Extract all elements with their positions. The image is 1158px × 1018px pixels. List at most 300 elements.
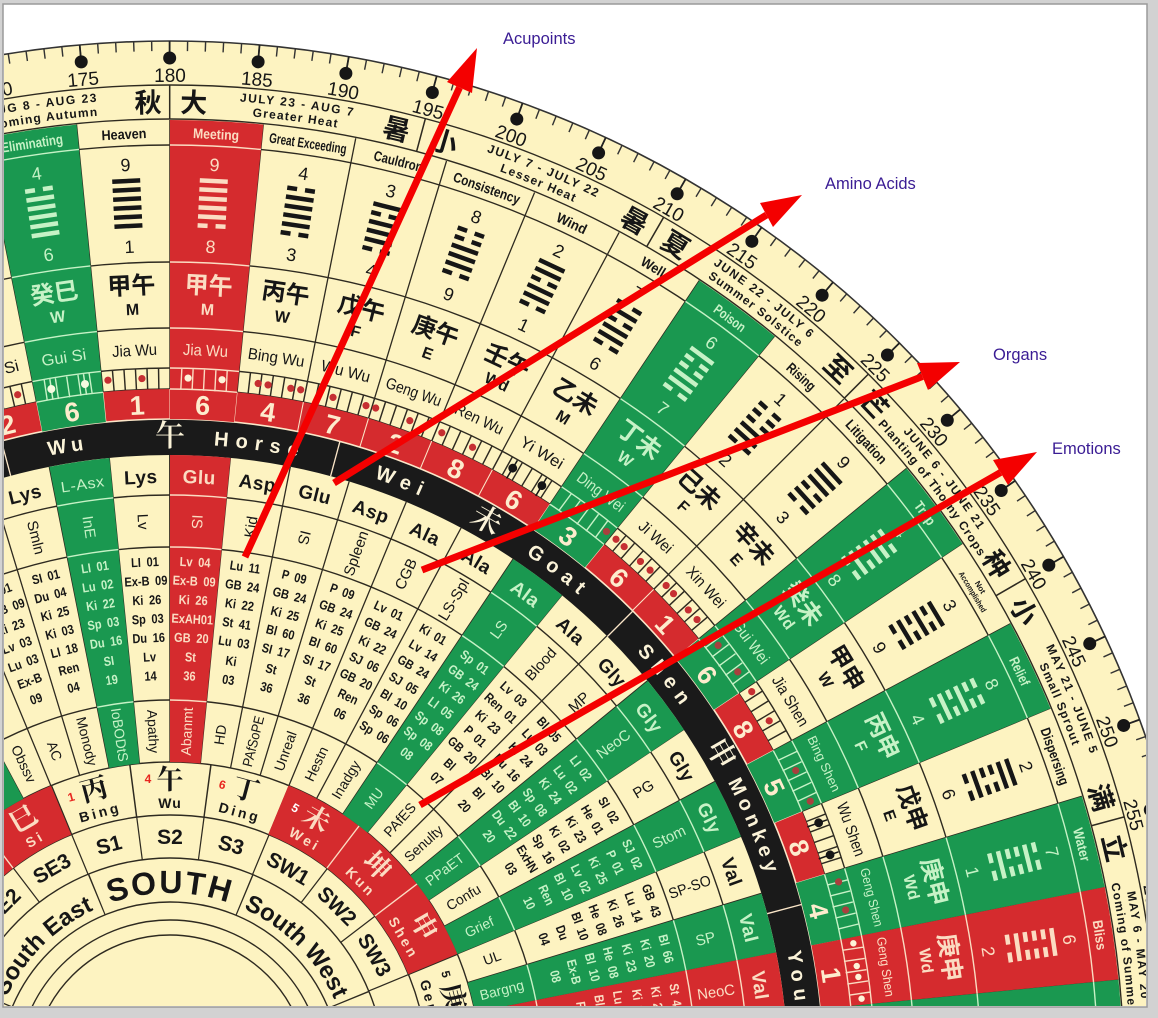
sector: Well: M (552, 407, 573, 429)
sector: Bliss: Wd (915, 947, 935, 974)
sector: Water: Ki 20 (637, 938, 658, 970)
solar term dates: JULY 23 - AUG 7 (240, 94, 354, 116)
stem ring: Bing: 丙 (75, 765, 112, 810)
solar term characters: 暑 (380, 112, 413, 148)
sector: Great Exceeding: Lu 03 (217, 633, 251, 652)
degree dot stems (78, 41, 1140, 724)
sector: Meeting: 甲午 (184, 272, 233, 301)
sector: Consistency: 9 (441, 283, 457, 305)
sector: Monody: Smln (23, 519, 48, 556)
sector: Great Exceeding: GB 24 (224, 576, 261, 596)
direction sectors: SW2 (312, 882, 361, 931)
sector: Poison: Poison (711, 301, 749, 335)
sector: Water: Ki 23 (618, 942, 640, 974)
sector: Dispersing: Bl 10 (568, 910, 592, 943)
direction sectors (0, 826, 395, 981)
zodiac band labels: Horse (214, 432, 298, 456)
sector: Heaven: Jia Wu (112, 342, 157, 361)
sector: Rising (384, 362, 815, 837)
sector: Relief: Stom (650, 822, 689, 853)
sector: Not Accomplished: Jia Shen (768, 673, 811, 730)
degree labels: 180 (154, 66, 186, 87)
sector: Not Accomplished: ExHN (513, 842, 541, 875)
sector: Consistency: Unreal (271, 729, 300, 773)
sector: Cauldron: IS (294, 528, 314, 546)
sector: Eliminating: IoBODtS (108, 707, 132, 763)
sector: Litigation: Litigation (842, 416, 891, 467)
solar term characters (134, 88, 1131, 865)
arrow: acupoints (245, 48, 477, 557)
icon: hexagram (789, 463, 841, 514)
sector: Well: 乙未 (547, 374, 602, 421)
sector: Consistency: GB 24 (317, 597, 355, 622)
icon: hexagram (362, 203, 401, 254)
number ring (4, 389, 824, 882)
zodiac band labels: Shen (638, 644, 688, 705)
sector: Cauldron: P 09 (280, 567, 308, 587)
sector: Heaven: 甲午 (107, 272, 156, 301)
degree labels: 230 (915, 414, 952, 451)
solar term characters: 至 (818, 349, 858, 390)
sector: Dispersing: 戊申 (891, 781, 932, 835)
sector: Litigation: Bl 10 (477, 765, 508, 797)
label: Emotions: Emotions (1052, 440, 1121, 458)
sector: Meeting: Ki 26 (178, 592, 208, 609)
direction sectors: S3 (216, 831, 246, 860)
sector: Trap: Gly (630, 699, 666, 737)
sector: Wind: 8 (442, 452, 469, 486)
solar term dates: MAY 6 - MAY 20 (1127, 891, 1146, 998)
sector: Wind: Wind (554, 209, 590, 237)
degree dots (74, 52, 1146, 815)
solar term characters: 秋 (134, 88, 162, 119)
sector: Meeting: St (185, 649, 196, 665)
icon: hexagram (989, 842, 1040, 881)
sector: Wind: Hestn (301, 744, 331, 784)
sector: Relief: 5 (757, 774, 791, 801)
sector: Relief: Lv 02 (567, 862, 594, 896)
sector: Trap: 8 (823, 570, 845, 590)
solar term dates: Coming of Summer (1112, 883, 1134, 1005)
solar term dates: JUNE 6 - JUNE 21 (904, 428, 984, 530)
sector: Litigation: Du 16 (490, 751, 523, 785)
sector: Cauldron: Cauldron (372, 147, 425, 175)
stem ring: Bing: 1 (66, 789, 77, 805)
sector: Heaven: Lv (134, 513, 151, 531)
sector: Relief: 8 (981, 676, 1003, 693)
icon: hexagram (729, 402, 780, 454)
zodiac band labels: 未 (464, 491, 512, 544)
degree labels: 235 (969, 482, 1004, 520)
sector: Monody: Lys (7, 481, 44, 510)
sector: Heaven: 9 (120, 155, 131, 175)
sector: Bliss: St 41 (666, 983, 685, 1014)
sector: Well: 7 (628, 282, 647, 304)
sector: Trap (425, 500, 934, 886)
solar term dates: JULY 7 - JULY 22 (488, 144, 598, 197)
sector: Wind: Ki 22 (356, 632, 389, 658)
sector: Rising: Rising (783, 359, 819, 394)
sector: Eliminating: Lu 02 (81, 576, 115, 596)
sector: Dispersing: 04 (535, 931, 553, 948)
sector: Cauldron: 3 (384, 180, 398, 202)
sector: Cauldron: Wu Wu (319, 358, 372, 386)
sector: Dispersing: SP-SO (666, 872, 713, 903)
sector: Eliminating: 6 (62, 396, 82, 428)
sector: Bliss: 庚申 (932, 932, 967, 983)
sector: Heaven: Lys (124, 467, 158, 490)
zodiac band labels: 午 (155, 411, 185, 455)
sector: Monody: Ki 25 (39, 603, 71, 625)
sector: Heaven: 14 (144, 668, 157, 684)
sector: Not Accomplished: 甲申 (822, 641, 869, 696)
degree labels: 250 (1091, 714, 1122, 751)
sector: Wind: 2 (550, 240, 567, 262)
sector: Heaven: Ex-B 09 (124, 573, 168, 590)
sector: Water: 1 (961, 865, 983, 879)
sector: Poison: 08 (397, 744, 416, 764)
sector: Wind: GB 20 (337, 665, 375, 694)
sector: Water: Bargng (478, 977, 526, 1003)
direction sectors: SE3 (29, 849, 75, 889)
sector: Well: Sp 06 (357, 718, 392, 747)
sector: Relief: P 01 (603, 848, 627, 877)
sector: Trap: Ki 24 (536, 775, 565, 807)
sector: Trap: Sp 08 (519, 785, 551, 820)
sector: Poison: Sp 08 (412, 708, 447, 739)
solar term dates: MAY 21 - JUNE 5 (1046, 644, 1098, 753)
sector: Not Accomplished: W (814, 670, 836, 692)
sector: Relief: Bing Shen (804, 733, 844, 794)
sector: Wind: Lv 01 (371, 597, 406, 624)
sector: Monody: Ki 03 (44, 621, 76, 643)
sector: Litigation: 20 (455, 797, 474, 816)
sector: AC: Lu 03 (6, 651, 41, 676)
sector: Bliss: 2 (977, 945, 999, 958)
sector: Meeting: 6 (195, 390, 211, 421)
sector: Well: 6 (499, 483, 528, 517)
sector: Water: Bl 10 (581, 951, 603, 983)
sector: Poison: W (614, 448, 637, 472)
direction sectors: S2 (157, 826, 183, 849)
sector: Meeting: ExAH01 (171, 611, 214, 628)
sector: Poison: LS (487, 617, 512, 642)
sector: Consistency: 8 (468, 206, 484, 228)
sector: Rising: Ji Wei (635, 518, 676, 557)
solar term characters: 芒 (853, 385, 894, 425)
sector: Trap: Du 22 (489, 807, 520, 843)
label: Acupoints: Acupoints (503, 30, 575, 48)
stem ring: Geng (416, 965, 480, 1018)
sector: Not Accomplished: PG (630, 777, 657, 802)
solar term characters: 小 (427, 124, 461, 161)
sector: Wind: Wd (482, 370, 511, 396)
sector: Water: 庚申 (915, 855, 954, 908)
sector: Wind: 壬午 (479, 339, 534, 384)
solar term characters: 种 (976, 545, 1016, 584)
stem ring: Ding: 丁 (228, 765, 265, 810)
sector: Trap: Gui Wei (729, 617, 772, 668)
direction sectors: S1 (94, 831, 125, 860)
sector: Cauldron: PAfSoPE (239, 714, 267, 768)
sector: Consistency: 庚午 (408, 310, 463, 352)
sector: Water (473, 814, 1097, 1018)
stem ring: Geng: 庚 (433, 978, 478, 1015)
sector: Not Accomplished: 03 (501, 860, 521, 878)
solar term dates: JUNE 22 - JULY 6 (714, 259, 814, 337)
sector: Trap: 癸未 (777, 577, 828, 631)
sector: Water: Val (734, 912, 761, 945)
sector: Well: GB 24 (395, 652, 432, 683)
sector: Wind (304, 212, 588, 782)
sector: Dispersing: Wu Shen (833, 800, 868, 859)
sector: Great Exceeding: W (273, 308, 292, 327)
sector: Litigation: 1 (649, 609, 681, 640)
sector: Great Exceeding: Asp (237, 471, 277, 497)
sector: Well: Bl 10 (378, 686, 410, 714)
icon: hexagram (594, 300, 641, 353)
sector: Poison: MU (361, 785, 387, 812)
sector: Litigation: Lu 03 (519, 726, 551, 759)
icon: hexagram (112, 180, 142, 227)
solar term characters: 夏 (656, 225, 695, 265)
stem ring: Shen: 申 (402, 904, 450, 947)
icon: hexagram (281, 188, 315, 236)
sector: Monody (4, 360, 96, 765)
sector: Bliss: NeoC (696, 981, 736, 1004)
sector: Poison: Ding Wei (573, 469, 628, 516)
solar term characters: 大 (180, 88, 208, 119)
sector: Great Exceeding: Great Exceeding (268, 130, 348, 157)
stem ring: Wei: Wei (286, 824, 324, 855)
sector: Dispersing: 2 (1015, 759, 1037, 775)
sector: Well: 6 (586, 353, 605, 375)
sector: Eliminating: 19 (105, 672, 119, 688)
sector: Eliminating: Ki 22 (85, 595, 116, 614)
sector: Monody: 04 (66, 679, 82, 696)
sector: Not Accomplished (431, 558, 998, 931)
stem ring: Geng: 5 (438, 969, 454, 980)
sector: Wind: Ren (335, 685, 361, 708)
sector: Heaven: Ki 26 (132, 592, 162, 609)
sector: Consistency: E (419, 344, 435, 364)
sector: Consistency: Spleen (341, 529, 372, 578)
sector: Water: SP (694, 929, 717, 950)
sector: Rising: PAfES (380, 799, 419, 840)
sector: Dispersing: Lu 14 (621, 890, 646, 925)
sector: Heaven: Heaven (101, 125, 147, 143)
icon: hexagram (890, 602, 943, 649)
sector: left partial: Obssv (8, 742, 40, 785)
sector: Bliss: 1 (815, 965, 847, 985)
sector: Relief (453, 641, 1041, 962)
sector: Meeting: 9 (209, 155, 220, 175)
sector: Meeting: 36 (183, 668, 196, 684)
sector: Not Accomplished: He 01 (578, 802, 607, 838)
sector: Not Accomplished: 3 (939, 596, 961, 615)
sector: Rising: 2 (715, 449, 736, 471)
sector: Cauldron: GB 24 (271, 584, 308, 607)
sector: Cauldron: Ki 25 (269, 603, 301, 625)
icon: hexagram (664, 347, 713, 400)
sector: Eliminating: Eliminating (0, 131, 64, 156)
sector: Dispersing: UL (481, 947, 503, 968)
degree scale ticks (8, 42, 1146, 758)
sector: Great Exceeding (214, 133, 346, 744)
sector: Well: Lv 14 (406, 636, 440, 665)
degree labels: 215 (723, 239, 761, 274)
icon: hexagram (1007, 928, 1055, 962)
sector: Well: Yi Wei (517, 434, 566, 473)
sector: Relief: Ren (535, 882, 558, 908)
degree labels: 245 (1057, 633, 1089, 671)
sector: AC: Ex-B (15, 670, 44, 692)
sector: Litigation (385, 413, 891, 879)
sector: Dispersing: Val (716, 855, 745, 890)
direction sectors: SW3 (353, 930, 395, 981)
sector: Cauldron: 7 (321, 409, 343, 441)
sector: Wind: 06 (331, 704, 349, 723)
sector: Cauldron: St (264, 661, 278, 678)
sector: Rising: 07 (427, 769, 447, 789)
sector: Not Accomplished: 9 (868, 638, 890, 657)
sector: Monody: LI 18 (49, 640, 80, 661)
stem ring: Si: Si (23, 827, 47, 851)
sector: Relief: 丙申 (859, 709, 904, 764)
sector: Cauldron: 戊午 (335, 290, 388, 328)
zodiac band labels: You (788, 950, 806, 1000)
stem ring: Ding: Ding (217, 799, 263, 826)
sector: Eliminating: Sp 03 (86, 614, 121, 633)
sector: AC: Lv 03 (0, 633, 34, 658)
sector: Dispersing: GB 43 (639, 882, 664, 920)
sector: Rising: 1 (770, 389, 791, 410)
stem ring: Kun (342, 837, 406, 901)
sector: Meeting (172, 128, 238, 756)
sector: Not Accomplished: SI 02 (595, 794, 622, 826)
sector: Great Exceeding: Ki (225, 653, 238, 669)
degree labels: 240 (1016, 556, 1050, 594)
sector: Eliminating: Du 16 (89, 633, 124, 652)
sector: Poison: 6 (701, 332, 721, 354)
arrow: organs (422, 362, 960, 570)
sector: Relief: Bl 10 (551, 871, 577, 903)
sector: Dispersing: He 08 (585, 902, 610, 938)
sector: Meeting: GB 20 (174, 630, 209, 647)
icon: hexagram (931, 679, 983, 723)
sector: Dispersing (473, 725, 1073, 989)
direction sectors: SW1 (262, 848, 313, 891)
sector: Great Exceeding: Bing Wu (247, 346, 305, 371)
arrow: amino acids (334, 195, 802, 483)
sector: Consistency: Consistency (451, 169, 523, 207)
sector: Poison: Ki 26 (436, 678, 468, 708)
stem ring: Si: 巳 (1, 793, 44, 841)
sector: Consistency: St (303, 672, 318, 690)
sector: Consistency (274, 172, 520, 770)
sector: Relief: F (850, 739, 870, 755)
sector: Rising: 己未 (672, 463, 726, 516)
zodiac band labels: Goat (528, 546, 586, 594)
sector: Heaven: LI 01 (131, 554, 159, 571)
sector: Bliss: Geng Shen (874, 936, 897, 998)
sector: Cauldron: SI 17 (260, 640, 292, 662)
sector: Consistency: Bl 60 (307, 633, 339, 657)
solar term dates: Lesser Heat (500, 164, 576, 202)
sector: Consistency: 2 (383, 427, 407, 461)
heading: SOUTH: SOUTH (107, 870, 232, 902)
sector: Heaven: Lv (143, 649, 157, 665)
zodiac band labels: Monkey (728, 777, 776, 870)
sector: Poison: Ala (506, 577, 543, 612)
sector: Heaven: Du 16 (132, 630, 166, 647)
sector: AC (4, 583, 62, 760)
sector: Litigation: Bl 05 (534, 714, 564, 746)
sector: Cauldron (242, 151, 421, 767)
sector: Rising: Ala (551, 614, 588, 650)
sector: Rising: Ren 01 (481, 690, 520, 727)
icon: hexagram (964, 759, 1016, 800)
stem ring: Wei (277, 787, 342, 855)
sector: Consistency: SI 17 (301, 651, 333, 675)
sector: Litigation: Gly (593, 654, 630, 692)
degree labels: 205 (572, 154, 610, 186)
sector: Rising: Lv 03 (497, 678, 530, 710)
sector: Not Accomplished: Ki 02 (546, 823, 574, 856)
sector: Eliminating: LI 01 (80, 558, 110, 577)
degree labels: 200 (492, 121, 529, 152)
sector: Cauldron: F (349, 323, 363, 342)
sector: Water: Wd (899, 873, 922, 902)
sector: Cauldron: Glu (296, 481, 333, 510)
sector: Water: 08 (547, 969, 564, 985)
sector: Poison: Sp 08 (401, 723, 436, 754)
sector: Meeting: Meeting (193, 125, 239, 143)
sector: Consistency: P 09 (328, 580, 357, 603)
stem ring: Bing (62, 763, 123, 827)
label: Organs: Organs (993, 346, 1047, 364)
sector: Eliminating: 4 (30, 163, 43, 184)
sector: Eliminating: 6 (42, 244, 55, 266)
solar term dates: Small Sprout (1040, 663, 1080, 746)
sector: Great Exceeding: Lu 11 (229, 558, 262, 577)
sector: Trap: NeoC (593, 726, 634, 763)
sector: Water: 4 (802, 900, 834, 922)
stem ring: Wei: 5 (289, 800, 302, 816)
sector: Not Accomplished: 8 (726, 715, 760, 744)
sector: Bliss: Val (747, 970, 772, 1001)
sector: Eliminating: SI (103, 653, 115, 669)
sector: Eliminating: W (49, 308, 68, 327)
sector: Rising: GB 20 (445, 733, 480, 768)
sector: Great Exceeding: Kid (242, 515, 262, 539)
sector: Monody: Monody (73, 715, 101, 767)
sector: Great Exceeding: 4 (258, 396, 278, 428)
sector: Trap: Trap (911, 498, 939, 528)
stem ring: Kun: 坤 (356, 841, 402, 887)
sector: Rising: Bl (440, 755, 459, 774)
icon: hexagram (25, 188, 59, 236)
sector: Heaven: Apathy (144, 709, 162, 754)
sector: Meeting: Ex-B 09 (172, 573, 216, 590)
sector: Relief: Gly (692, 799, 725, 837)
sector: Water: Water (1070, 826, 1094, 864)
sector: Meeting: M (200, 302, 215, 319)
solar term characters: 小 (1004, 593, 1043, 631)
stem ring: Ding (211, 762, 272, 826)
zodiac band labels: Wei (378, 465, 424, 496)
sector: Great Exceeding: 4 (297, 163, 310, 184)
